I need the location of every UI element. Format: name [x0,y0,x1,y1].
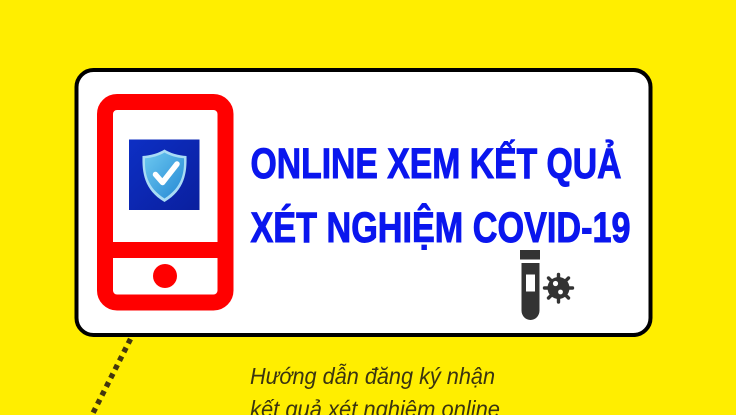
subtitle text [250,362,500,415]
dotted connector line [92,339,130,415]
icon: app shield logo [129,140,200,210]
title line 1: ONLINE XEM KẾT QUẢ [250,139,622,188]
title line 2: XÉT NGHIỆM COVID-19 [250,203,630,252]
icon: red smartphone [105,102,226,302]
panel: title card [76,70,650,335]
subtitle line 1: Hướng dẫn đăng ký nhận [250,362,495,389]
title [250,139,630,252]
icon: test tube with virus [520,250,572,320]
